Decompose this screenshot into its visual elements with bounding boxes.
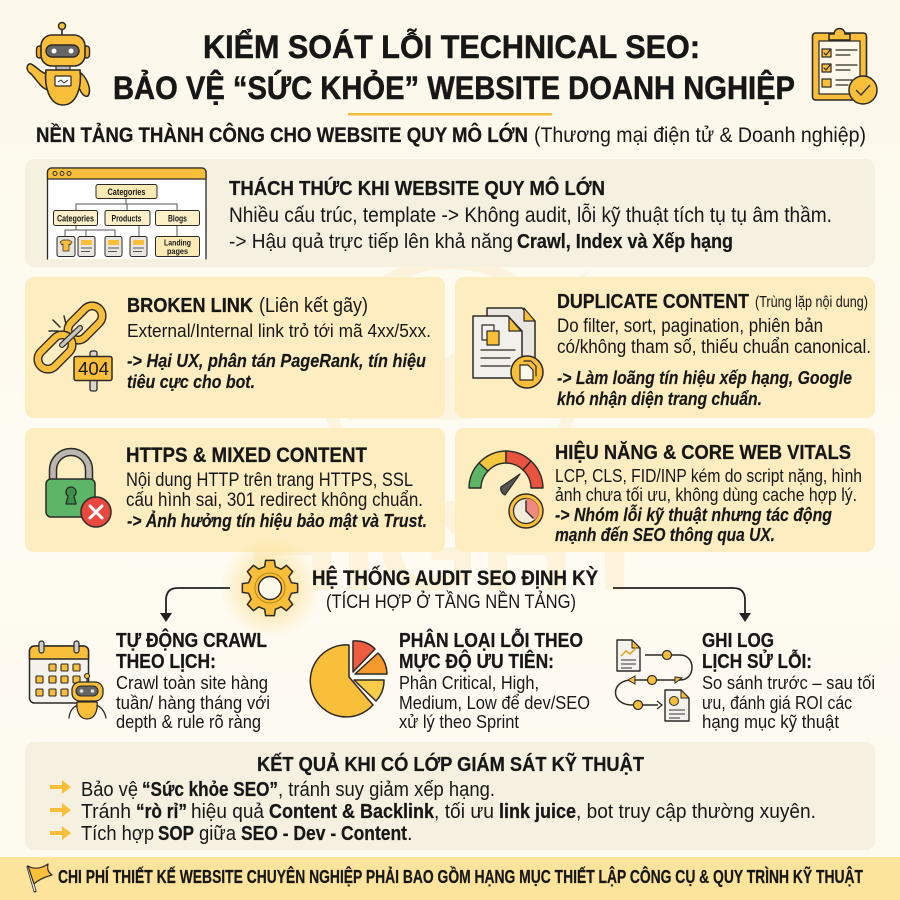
bullet: content and backlink: Tránh (81, 801, 131, 823)
column text: automatic crawl (116, 628, 270, 732)
arrow: right branch (613, 588, 751, 622)
panel text: performance: LCP, CLS, FID/INP kém do script nặng, hình (555, 466, 862, 486)
panel: performance and core web vitals (455, 428, 875, 552)
panel text: duplicate content: có/không tham số, thiếu chuẩn canonical. (557, 337, 871, 358)
icon: broken chain with 404 sign: 404 (78, 359, 109, 379)
subtitle: NỀN TẢNG THÀNH CÔNG CHO WEBSITE QUY MÔ LỚN (36, 123, 528, 147)
panel text: broken link: tiêu cực cho bot. (127, 371, 255, 392)
bullet: content and backlink: link juice (499, 801, 576, 823)
heading: audit system (312, 566, 598, 613)
panel text: duplicate content: Do filter, sort, pagination, phiên bản (557, 316, 823, 337)
icon: website sitemap window: Blogs (168, 214, 187, 224)
bullet: sop: Tích hợp (81, 823, 154, 845)
column text: error history log: So sánh trước – sau tối (702, 672, 875, 693)
panel text: broken link: BROKEN LINK (127, 295, 254, 317)
panel text: https and mixed content: HTTPS & MIXED CONTENT (126, 444, 367, 467)
subtitle (36, 123, 866, 147)
bullet: content and backlink: , tối ưu (434, 801, 494, 823)
panel: results (25, 742, 875, 850)
column text: error history log: GHI LOG (702, 630, 774, 652)
bullet: sop (81, 823, 413, 845)
arrow: left branch (160, 588, 230, 622)
icon: flag (28, 864, 52, 891)
title underline (348, 113, 552, 116)
text: HIGHT (245, 484, 655, 616)
panel text: broken link (127, 295, 431, 392)
panel text: https and mixed content: cấu hình sai, 301 redirect không chuẩn. (126, 490, 423, 511)
banner: bottom call to action (0, 857, 900, 900)
panel text: performance: mạnh đến SEO thông qua UX. (555, 524, 775, 545)
icon: website sitemap window: Categories (57, 214, 94, 224)
panel text: performance: HIỆU NĂNG & CORE WEB VITALS (555, 440, 851, 464)
panel text: duplicate content (557, 291, 871, 409)
column text: priority classification: MỰC ĐỘ ƯU TIÊN: (399, 649, 554, 673)
icon: duplicate documents (473, 308, 543, 388)
panel: broken link (25, 277, 445, 418)
bullet: sop: giữa (199, 823, 237, 845)
column text: automatic crawl: depth & rule rõ ràng (116, 711, 261, 732)
icon: speed gauge with clock (469, 451, 543, 528)
heading: audit system: HỆ THỐNG AUDIT SEO ĐỊNH KỲ (312, 566, 598, 590)
bullet: content and backlink: “rò rỉ” (136, 801, 187, 823)
bullet: content and backlink: Content & Backlink (269, 801, 435, 823)
bullet arrows (50, 780, 71, 840)
panel text: broken link: (Liên kết gãy) (259, 295, 368, 317)
bullet: content and backlink: , bot truy cập thường xuyên. (576, 801, 816, 823)
bullet: sop: SEO - Dev - Content (241, 823, 407, 845)
bullet: seo health (81, 779, 495, 801)
panel text: challenge: Crawl, Index và Xếp hạng (517, 230, 733, 253)
bullet: sop: . (407, 823, 413, 845)
panel text: duplicate content: DUPLICATE CONTENT (557, 291, 749, 313)
panel text: https and mixed content: Nội dung HTTP trên trang HTTPS, SSL (126, 470, 413, 491)
panel text: duplicate content: khó nhận diện trang chuẩn. (557, 388, 762, 409)
panel text: challenge: -> Hậu quả trực tiếp lên khả năng (229, 230, 513, 253)
icon: robot mascot (27, 22, 89, 105)
panel text: duplicate content: (Trùng lặp nội dung) (755, 294, 868, 311)
bullet: seo health: , tránh suy giảm xếp hạng. (278, 779, 495, 801)
bullet: sop: SOP (158, 823, 194, 845)
column text: automatic crawl: tuần/ hàng tháng với (116, 692, 270, 713)
icon: website sitemap window (48, 168, 206, 259)
title: KIỂM SOÁT LỖI TECHNICAL SEO: (203, 29, 700, 65)
subtitle: (Thương mại điện tử & Doanh nghiệp) (534, 124, 866, 147)
icon: gear (220, 538, 320, 638)
column text: automatic crawl: Crawl toàn site hàng (116, 672, 268, 693)
column text: error history log: LỊCH SỬ LỖI: (702, 649, 812, 673)
icon: log workflow (616, 640, 692, 721)
column: error history log (616, 630, 875, 732)
panel heading: results: KẾT QUẢ KHI CÓ LỚP GIÁM SÁT KỸ THUẬT (257, 752, 644, 776)
icon: website sitemap window: Landing (164, 238, 191, 248)
column text: priority classification: xử lý theo Sprint (399, 711, 519, 732)
panel text: broken link: External/Internal link trỏ tới mã 4xx/5xx. (127, 320, 431, 341)
panel text: challenge (229, 176, 832, 253)
bullet: content and backlink (81, 801, 816, 823)
icon: website sitemap window: Products (112, 214, 142, 224)
panel text: performance: ảnh chưa tối ưu, không dùng cache hợp lý. (555, 485, 857, 505)
bullet: seo health: Bảo vệ (81, 779, 138, 801)
icon: calendar with robot (30, 641, 106, 719)
panel text: challenge: Nhiều cấu trúc, template -> Không audit, lỗi kỹ thuật tích tụ tụ âm thầm. (229, 204, 832, 227)
column: automatic crawl (30, 628, 270, 732)
column text: error history log: ưu, đánh giá ROI các (702, 692, 852, 713)
column text: priority classification: Medium, Low để dev/SEO (399, 692, 590, 713)
column text: automatic crawl: THEO LỊCH: (116, 651, 216, 673)
icon: clipboard checklist (812, 29, 877, 104)
icon: pie chart (310, 641, 387, 717)
column text: priority classification (399, 628, 590, 732)
icon: website sitemap window: pages (167, 246, 188, 256)
column: priority classification (310, 628, 590, 732)
column text: error history log (702, 630, 875, 732)
column text: automatic crawl: TỰ ĐỘNG CRAWL (116, 628, 267, 652)
panel text: performance (555, 440, 862, 545)
panel: https and mixed content (25, 428, 445, 552)
icon: website sitemap window: Categories (108, 187, 146, 197)
bullet: seo health: “Sức khỏe SEO” (142, 779, 278, 801)
heading: audit system: (TÍCH HỢP Ở TẦNG NỀN TẢNG) (326, 591, 576, 613)
title (113, 29, 795, 106)
panel text: performance: -> Nhóm lỗi kỹ thuật nhưng tác động (555, 504, 832, 525)
panel text: challenge: THÁCH THỨC KHI WEBSITE QUY MÔ LỚN (229, 176, 605, 200)
column text: error history log: hạng mục kỹ thuật (702, 711, 839, 732)
panel text: duplicate content: -> Làm loãng tín hiệu xếp hạng, Google (557, 367, 852, 388)
icon: broken chain with 404 sign (34, 302, 112, 391)
column text: priority classification: Phân Critical, High, (399, 672, 539, 693)
panel text: https and mixed content (126, 444, 427, 531)
panel: challenge (25, 159, 875, 267)
icon: padlock with error badge (46, 452, 111, 527)
column text: priority classification: PHÂN LOẠI LỖI THEO (399, 628, 583, 652)
panel text: broken link: -> Hại UX, phân tán PageRank, tín hiệu (127, 350, 426, 371)
panel text: https and mixed content: -> Ảnh hưởng tín hiệu bảo mật và Trust. (127, 510, 427, 531)
panel: duplicate content (455, 277, 875, 418)
title: BẢO VỆ “SỨC KHỎE” WEBSITE DOANH NGHIỆP (113, 70, 795, 106)
bullet: content and backlink: hiệu quả (191, 801, 265, 823)
